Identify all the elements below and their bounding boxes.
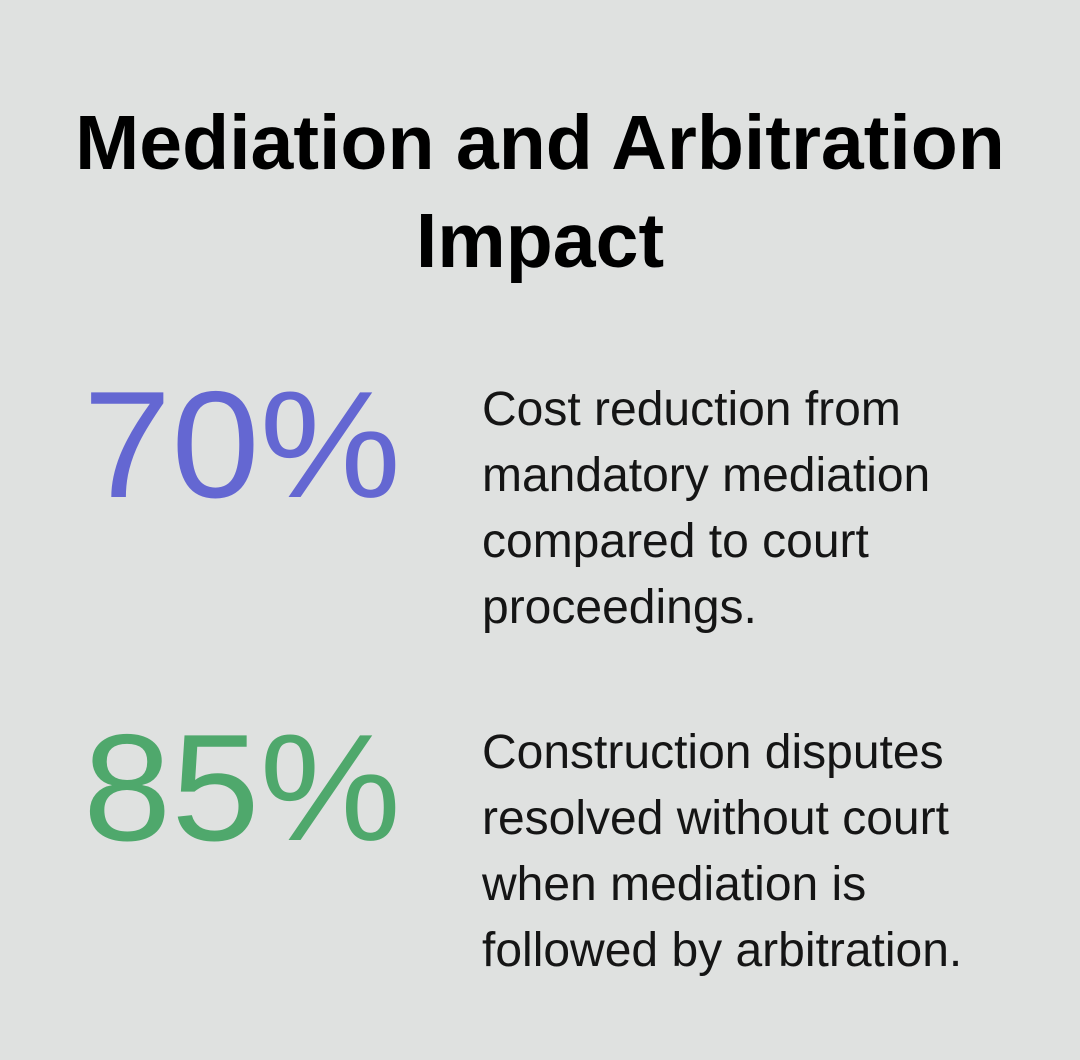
text: cost reduction: compared to court xyxy=(482,515,869,568)
text: disputes resolved: resolved without court xyxy=(482,792,949,845)
text: cost reduction: Cost reduction from xyxy=(482,383,901,436)
text: cost reduction: mandatory mediation xyxy=(482,449,930,502)
stat: 70%: 70% xyxy=(83,360,401,530)
text: disputes resolved xyxy=(482,726,962,977)
text: disputes resolved: followed by arbitration. xyxy=(482,924,962,977)
text: cost reduction: proceedings. xyxy=(482,581,757,634)
title: Impact xyxy=(416,198,664,284)
text: disputes resolved: Construction disputes xyxy=(482,726,944,779)
text: cost reduction xyxy=(482,383,930,634)
text: disputes resolved: when mediation is xyxy=(482,858,866,911)
title: Mediation and Arbitration xyxy=(75,100,1005,186)
title xyxy=(75,100,1005,284)
stat: 85%: 85% xyxy=(83,703,401,873)
